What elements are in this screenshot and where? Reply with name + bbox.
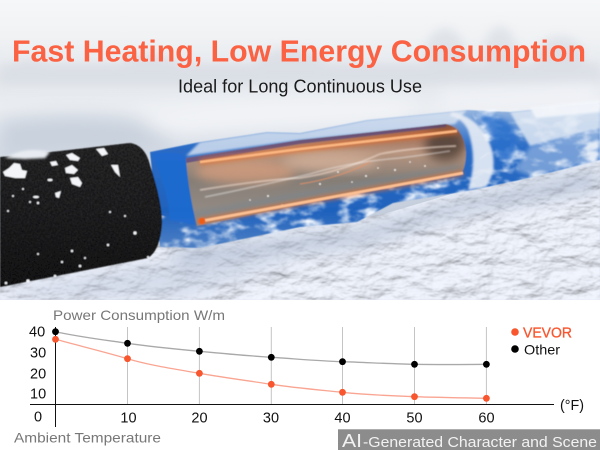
line chart: power consumption vs ambient temperature: [30, 327, 554, 427]
points: other: [52, 328, 490, 368]
heating element top: [200, 131, 457, 162]
y axis title: Power Consumption W/m: [53, 307, 225, 323]
x axis labels: 60: [478, 411, 495, 427]
x axis unit: (°F): [560, 398, 584, 414]
legend: [511, 326, 572, 357]
title: Fast Heating, Low Energy Consumption: [12, 34, 586, 69]
y axis labels: 40: [29, 325, 45, 341]
x axis labels: 40: [334, 411, 351, 427]
black insulation sleeve: [0, 143, 162, 287]
legend: VEVOR: [523, 326, 572, 342]
y axis labels: 30: [30, 346, 46, 362]
x axis labels: 30: [263, 411, 279, 427]
blurred winter treeline: [4, 27, 595, 78]
x axis labels: [120, 411, 495, 427]
chart panel background: [0, 300, 600, 450]
soft snow drift behind pipe: [0, 84, 600, 158]
snow flecks on sleeve: [3, 148, 149, 284]
heating element bottom: [197, 173, 463, 224]
clear sleeve end, right: [510, 103, 600, 146]
series line: other: [56, 332, 486, 364]
blue frosted pipe: [150, 100, 600, 248]
series line: VEVOR: [56, 339, 486, 398]
points: VEVOR: [52, 336, 490, 402]
heat cable assembly: [0, 100, 600, 287]
y axis labels: 10: [30, 386, 46, 402]
y axis labels: [29, 325, 46, 426]
x axis title: Ambient Temperature: [14, 430, 161, 446]
subtitle: Ideal for Long Continuous Use: [178, 77, 422, 97]
legend: Other: [524, 341, 560, 357]
x axis labels: 20: [191, 411, 208, 427]
x axis labels: 50: [406, 411, 423, 427]
glass window with water: [186, 124, 466, 228]
photo: snowy scene with heated pipe: [0, 0, 600, 300]
y axis labels: 20: [30, 366, 46, 382]
x axis labels: 10: [120, 411, 137, 427]
AI-generated notice: [338, 429, 600, 450]
foreground snow: [0, 150, 600, 300]
axes: [30, 327, 554, 427]
y axis labels: 0: [34, 410, 42, 426]
